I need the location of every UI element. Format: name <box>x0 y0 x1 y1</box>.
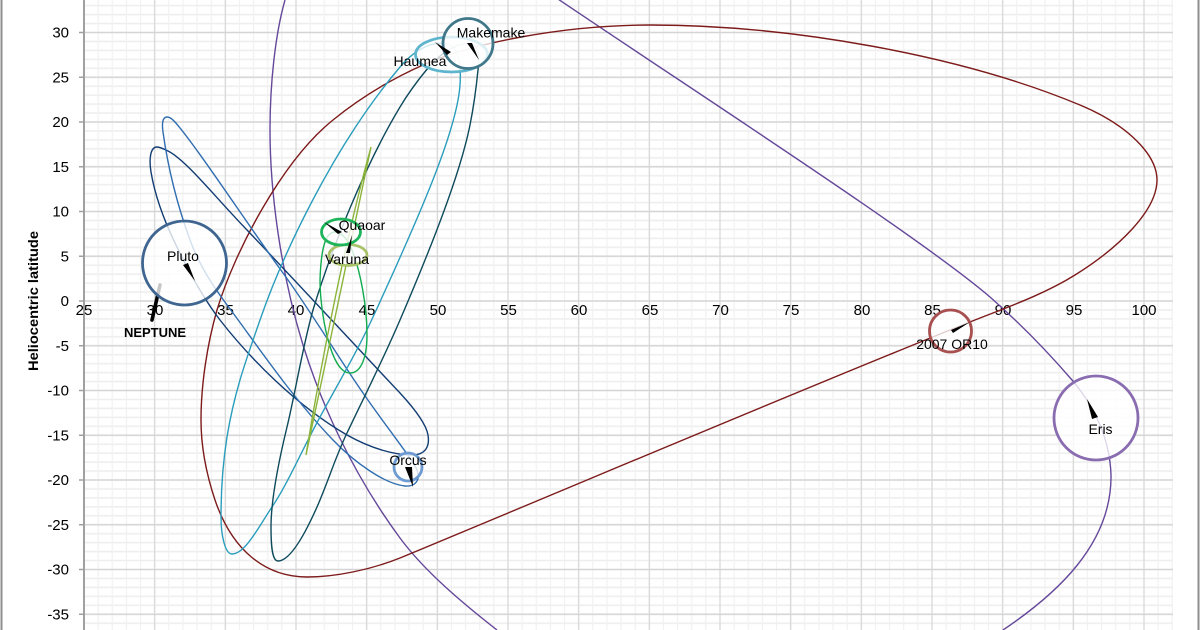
orbit: Pluto <box>150 147 428 455</box>
y axis: 0 <box>61 293 69 310</box>
label: 2007 OR10: 2007 OR10 <box>916 336 988 352</box>
label: Varuna: Varuna <box>325 251 369 267</box>
y axis: 20 <box>52 114 69 131</box>
y axis: 15 <box>52 159 69 176</box>
x axis labels: 65 <box>642 302 658 319</box>
x axis labels: 80 <box>854 302 870 319</box>
orbit: Quaoar <box>320 232 367 373</box>
label: Orcus: Orcus <box>389 452 427 468</box>
y axis: -25 <box>47 517 69 534</box>
label: Eris: Eris <box>1088 421 1113 437</box>
body: Orcus <box>394 453 422 481</box>
label: Haumea: Haumea <box>394 53 447 69</box>
body: Eris <box>1054 376 1138 460</box>
x axis labels: 75 <box>783 302 799 319</box>
orbit: Varuna <box>306 147 371 455</box>
pointers: black wedges from labels to bodies <box>183 42 1098 487</box>
body: Varuna <box>329 244 367 266</box>
x axis labels: 100 <box>1131 302 1157 319</box>
label: Pluto: Pluto <box>167 248 199 264</box>
body: Pluto <box>142 221 226 305</box>
orbit: Eris <box>270 0 1111 630</box>
x axis labels: 45 <box>359 302 375 319</box>
y axis: -15 <box>47 427 69 444</box>
x axis labels: 25 <box>76 302 92 319</box>
orbit: 2007 OR10 <box>201 25 1157 577</box>
x axis labels: 55 <box>500 302 517 319</box>
x axis labels <box>76 302 1157 319</box>
body: Makemake <box>443 18 493 68</box>
x axis labels: 40 <box>288 302 304 319</box>
x axis labels: 50 <box>430 302 446 319</box>
orbit: Orcus <box>162 117 418 486</box>
y axis <box>47 0 85 630</box>
orbit: Haumea <box>221 43 460 554</box>
y axis: -35 <box>47 606 69 623</box>
x axis labels: 30 <box>147 302 163 319</box>
orbit: Makemake <box>271 44 479 561</box>
x axis labels: 90 <box>995 302 1011 319</box>
y axis: 10 <box>52 204 69 220</box>
y axis: -20 <box>47 472 69 489</box>
x axis labels: 70 <box>712 302 729 319</box>
x axis labels: 60 <box>571 302 587 319</box>
body: Quaoar <box>322 219 360 245</box>
y axis: 5 <box>61 248 69 265</box>
body: 2007 OR10 <box>930 310 972 352</box>
body: Haumea <box>416 37 488 72</box>
y axis: 25 <box>52 69 69 86</box>
label: Makemake: Makemake <box>457 24 525 40</box>
y axis: -5 <box>56 338 69 355</box>
x axis labels: 35 <box>217 302 234 319</box>
y axis: -10 <box>47 382 69 400</box>
label: Neptune: NEPTUNE <box>124 325 186 340</box>
x axis labels: 95 <box>1066 302 1082 319</box>
label: Quaoar: Quaoar <box>339 217 386 233</box>
planet: Neptune marker <box>152 285 160 320</box>
y axis title: Heliocentric latitude <box>25 231 41 371</box>
y axis: -30 <box>47 562 69 578</box>
y axis: 30 <box>52 24 69 42</box>
x axis labels: 85 <box>924 302 941 319</box>
